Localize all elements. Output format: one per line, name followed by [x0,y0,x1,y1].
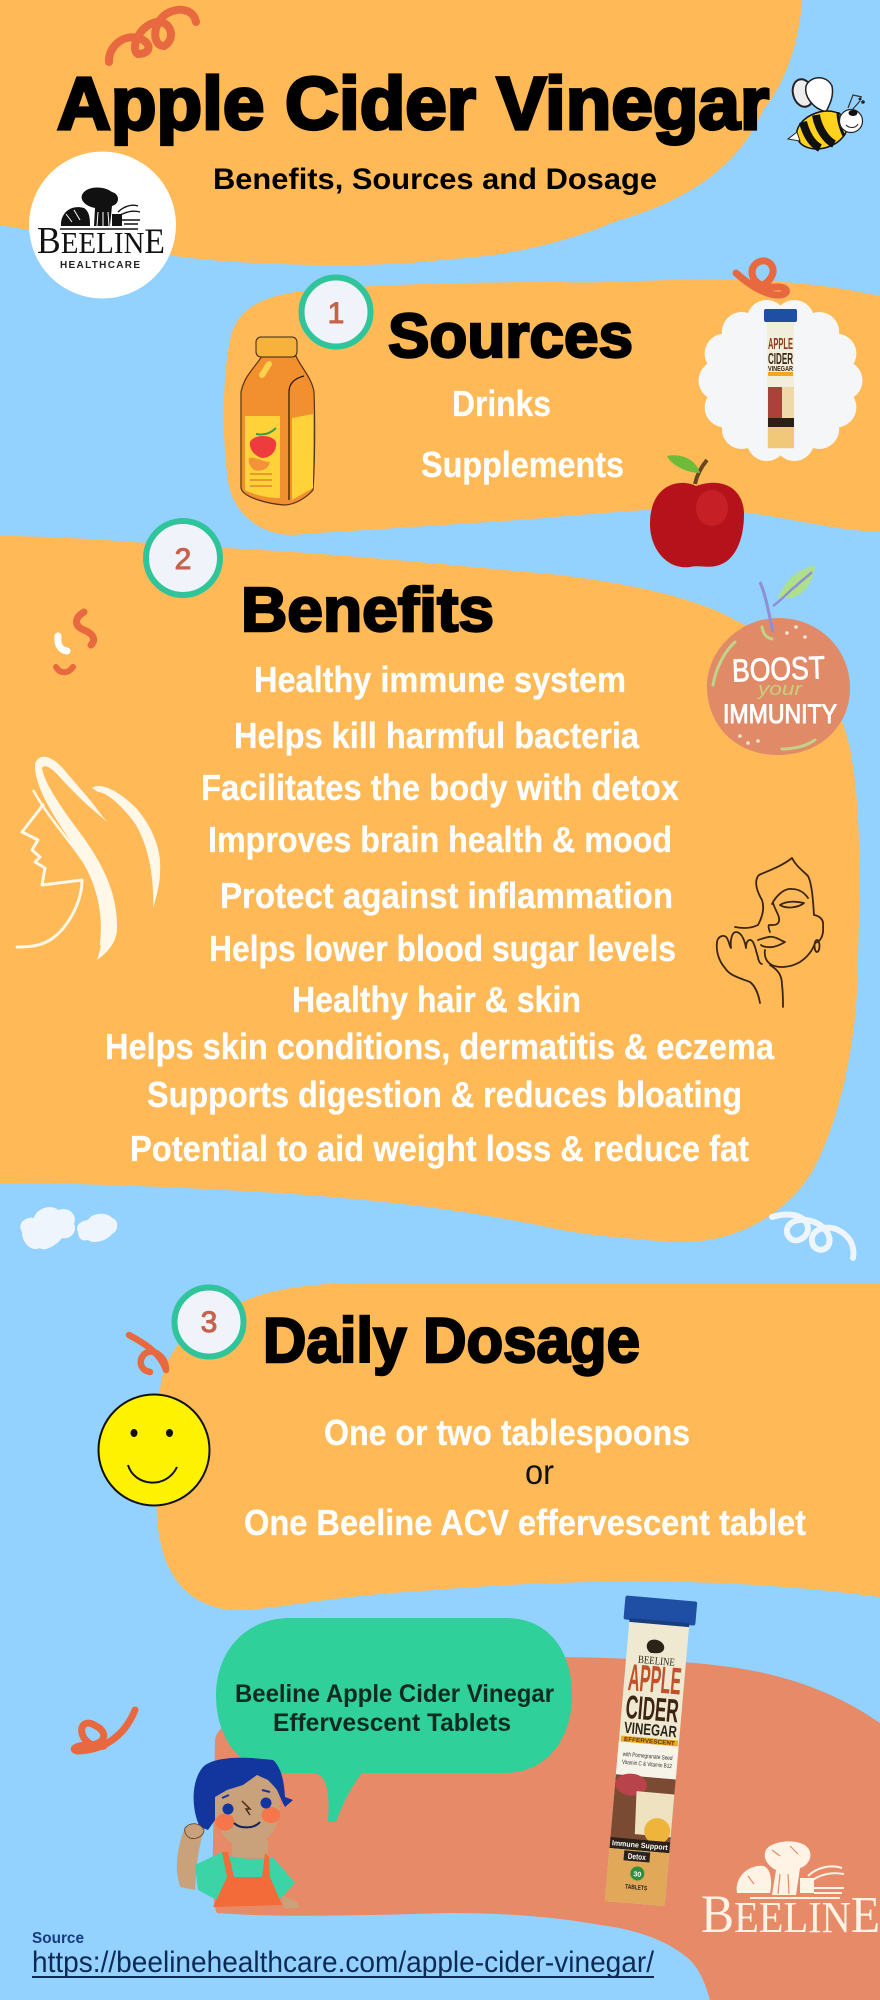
icon: number badge 3 [174,1288,244,1356]
logo: Beeline Healthcare badge: BEELINE [37,220,165,262]
icon: child with apron [177,1758,300,1908]
text: benefits list: Potential to aid weight loss & reduce fat [130,1128,749,1169]
icon: small effervescent tube: CIDER [768,351,793,368]
text: benefits list [105,659,775,1169]
icon: woman hair line art [17,757,160,960]
text: benefits list: Supports digestion & reduces bloating [147,1074,742,1115]
icon: boost your immunity badge: BOOST [731,649,826,689]
heading: benefits: Benefits [241,576,494,645]
icon: large effervescent tube: APPLE [627,1657,683,1704]
heading: daily dosage: Daily Dosage [263,1306,640,1376]
text: supplements: Supplements [421,444,624,485]
logo: white Beeline mark: BEELINE [701,1884,880,1944]
icon: number badge 2: 2 [175,543,191,576]
icon: small effervescent tube: APPLE [768,336,793,353]
icon: large effervescent tube: VINEGAR [623,1720,678,1741]
panel: benefits blob [0,536,859,1242]
icon: number badge 1 [302,278,370,346]
icon: large effervescent tube [599,1595,697,1907]
text: benefits list: Helps skin conditions, dermatitis & eczema [105,1026,775,1067]
panel: sources blob [224,280,880,535]
panel: header blob [0,0,802,265]
speech bubble [216,1618,572,1822]
icon: large effervescent tube: Vitamin C & Vitamin B12 [622,1760,673,1770]
icon: smiley face [98,1394,210,1506]
icon: large effervescent tube: with Pomegranate Seed [622,1752,673,1762]
icon: bee [788,77,865,155]
icon: clouds [20,1207,117,1249]
icon: small effervescent tube [764,309,797,449]
text: benefits list: Protect against inflammation [220,875,673,916]
icon: large effervescent tube: BEELINE [637,1654,676,1669]
icon: dosage coral squiggle [129,1335,166,1372]
subtitle: Benefits, Sources and Dosage [213,163,657,196]
panel: dosage blob [156,1283,880,1610]
icon: large effervescent tube: CIDER [624,1688,680,1729]
text: source URL: https://beelinehealthcare.com/apple-cider-vinegar/ [32,1946,655,1979]
title: Apple Cider Vinegar [57,62,769,145]
text: dosage option two: One Beeline ACV effervescent tablet [244,1502,806,1543]
speech bubble: Beeline Apple Cider Vinegar [235,1680,554,1708]
icon: tree illustration [60,188,140,229]
heading: sources: Sources [388,302,633,371]
icon: benefits squiggle marks [56,612,94,672]
icon: boost your immunity badge: your [755,679,803,699]
icon: white spiral [772,1215,853,1258]
icon: large effervescent tube: TABLETS [625,1884,648,1892]
logo: Beeline Healthcare badge [29,152,176,298]
text: benefits list: Improves brain health & mood [208,819,672,860]
icon: white tree illustration [737,1841,844,1898]
icon: number badge 3: 3 [201,1306,217,1339]
icon: large effervescent tube: Detox [627,1852,647,1862]
icon: boost your immunity badge: IMMUNITY [723,699,837,729]
text: benefits list: Helps lower blood sugar levels [209,928,676,969]
icon: boost your immunity badge [707,565,850,755]
text: drinks: Drinks [452,383,551,424]
text: benefits list: Healthy immune system [254,659,626,700]
icon: woman thinking line art [717,858,823,1007]
icon: red apple [650,455,744,567]
icon: large effervescent tube: EFFERVESCENT [624,1737,675,1747]
icon: small effervescent tube: VINEGAR [768,366,793,373]
text: benefits list: Helps kill harmful bacteria [234,715,640,756]
icon: large effervescent tube: 30 [633,1871,642,1879]
speech bubble: Effervescent Tablets [273,1709,511,1737]
logo: Beeline Healthcare badge: HEALTHCARE [60,260,140,271]
logo: white Beeline mark [701,1841,880,1944]
text: benefits list: Facilitates the body with detox [201,767,679,808]
icon: number badge 1: 1 [328,297,344,330]
icon: bottom coral squiggle [74,1710,135,1751]
icon: large effervescent tube: Immune Support [612,1838,669,1852]
text: dosage option one: One or two tablespoons [324,1412,690,1453]
icon: number badge 2 [146,521,220,595]
panel: product coral blob [213,1657,880,2000]
icon: juice bottle [241,337,315,505]
icon: scalloped product badge [698,300,862,461]
icon: top coral spiral [109,10,196,62]
text: or: or [525,1453,554,1492]
icon: small coral squiggle [736,261,786,295]
text: benefits list: Healthy hair & skin [292,979,581,1020]
text: source label: Source [32,1930,84,1947]
